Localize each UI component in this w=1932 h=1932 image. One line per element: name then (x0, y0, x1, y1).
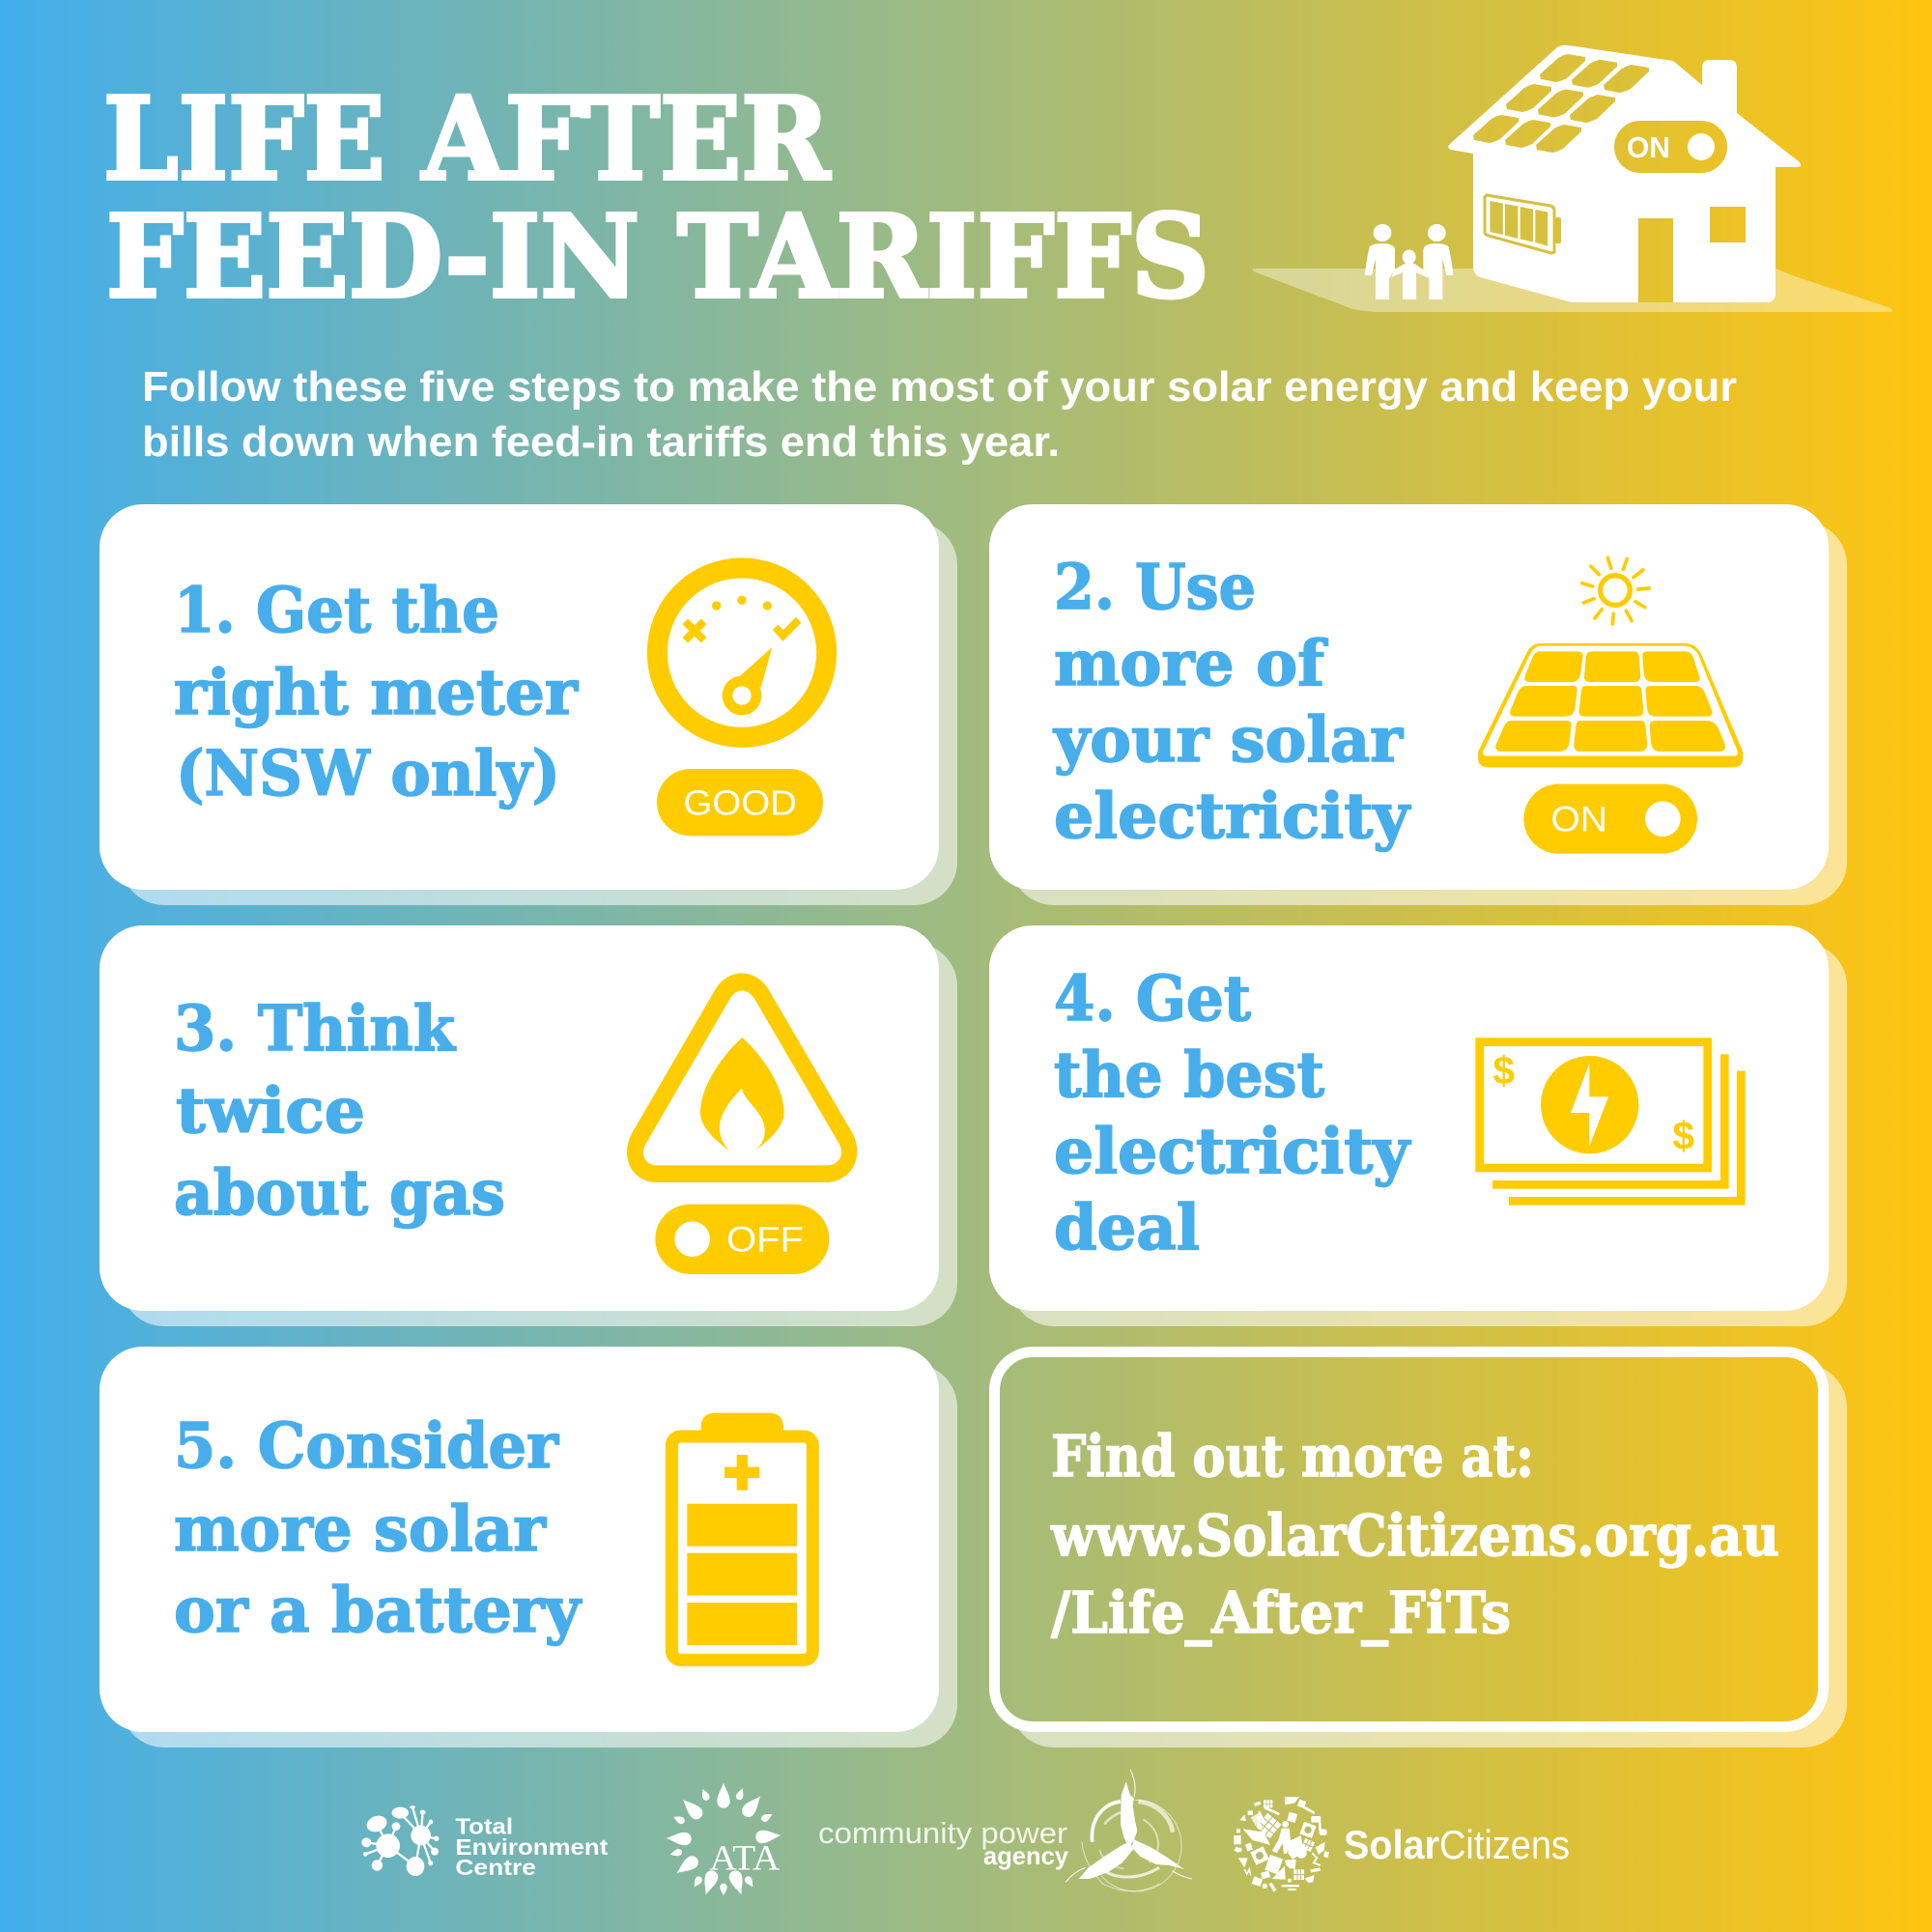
heading: step 3: twice (176, 1074, 365, 1148)
text: website link (1050, 1423, 1779, 1646)
logo: Total Environment Centre: Environment (455, 1834, 609, 1860)
heading: step 2: electricity (1054, 780, 1411, 853)
logo: ATA (666, 1783, 781, 1896)
icon: house with solar roof and family: ON (1627, 130, 1670, 164)
heading: step 4: deal (1054, 1191, 1200, 1264)
logo: Solar Citizens (1234, 1797, 1570, 1891)
logo: ATA: ATA (709, 1839, 780, 1879)
panel: step 5 (99, 1347, 957, 1747)
heading: step 3: 3. Think (174, 992, 457, 1065)
heading: step 5: or a battery (174, 1574, 582, 1647)
logo: Solar Citizens: Citizens (1439, 1822, 1570, 1867)
heading: step 2: 2. Use (1054, 551, 1256, 624)
panel: step 4 (989, 925, 1847, 1326)
title: LIFE AFTER (103, 71, 831, 206)
heading: step 4: the best (1054, 1038, 1324, 1112)
logo: community power agency: community power (818, 1816, 1067, 1850)
panel: step 1 (99, 504, 957, 905)
panel: step 2 (989, 504, 1847, 905)
logo: community power agency: agency (983, 1841, 1069, 1870)
heading: step 2: more of (1054, 627, 1328, 700)
heading: step 4 (1054, 962, 1411, 1264)
heading: step 5 (174, 1409, 582, 1647)
heading: step 4: 4. Get (1054, 962, 1251, 1036)
heading: step 1: (NSW only) (176, 737, 560, 810)
panel: find out more (995, 1352, 1847, 1747)
logo: Total Environment Centre (361, 1805, 609, 1880)
icon: sun, solar panel and on switch (1478, 557, 1743, 854)
text: website link: /Life_After_FiTs (1051, 1579, 1511, 1646)
heading: step 5: more solar (174, 1492, 547, 1566)
icon: meter with good label: GOOD (683, 782, 797, 822)
logo: Total Environment Centre: Total (455, 1813, 513, 1838)
heading: step 1: 1. Get the (174, 574, 499, 647)
icon: gas flame warning with off switch (627, 973, 857, 1274)
icon: meter with good label (657, 568, 827, 836)
logo: community power agency (818, 1770, 1192, 1891)
panel: step 3 (99, 925, 957, 1326)
title: FEED-IN TARIFFS (106, 189, 1209, 324)
logo: Solar Citizens: Solar (1344, 1822, 1439, 1867)
intro text: Follow these five steps to make the most of your solar energy and keep your (142, 363, 1737, 411)
heading: step 2 (1053, 551, 1411, 853)
heading: step 3: about gas (174, 1156, 505, 1230)
icon: banknotes with lightning bolt: $ (1492, 1048, 1515, 1093)
text: website link: www.SolarCitizens.org.au (1050, 1502, 1779, 1569)
icon: banknotes with lightning bolt: $ (1672, 1114, 1694, 1158)
icon: house with solar roof and family (1252, 45, 1892, 312)
icon: banknotes with lightning bolt (1480, 1042, 1741, 1201)
text: website link: Find out more at: (1051, 1423, 1534, 1490)
logo: Total Environment Centre: Centre (455, 1855, 536, 1880)
heading: step 4: electricity (1054, 1115, 1411, 1188)
heading: step 1 (174, 574, 579, 810)
icon: battery (671, 1413, 812, 1660)
heading: step 1: right meter (174, 656, 579, 729)
heading: step 3 (174, 992, 505, 1230)
heading: step 2: your solar (1053, 703, 1404, 777)
title (103, 71, 1209, 324)
icon: sun, solar panel and on switch: ON (1550, 800, 1607, 839)
heading: step 5: 5. Consider (174, 1409, 559, 1483)
intro text: bills down when feed-in tariffs end this year. (142, 418, 1060, 466)
intro text (142, 363, 1737, 466)
icon: gas flame warning with off switch: OFF (726, 1220, 804, 1260)
